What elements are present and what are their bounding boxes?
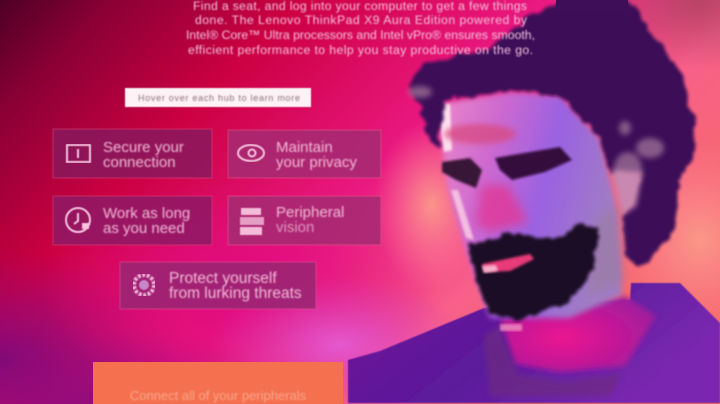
lip highlight (482, 265, 498, 273)
card: peripheral vision: vision (276, 219, 314, 236)
card: work as long as you need: as you need (103, 220, 185, 237)
hair (408, 4, 696, 268)
hair top edge fill (556, 0, 628, 12)
card: peripheral vision (228, 196, 381, 245)
nose edge highlight (451, 190, 474, 240)
icon: security gear (134, 275, 154, 295)
portrait of man (348, 0, 720, 403)
chin highlight (500, 324, 522, 331)
intro paragraph: Intel® Core™ Ultra processors and Intel vPro® ensures smooth, (186, 28, 535, 42)
hair side grey highlights (408, 86, 664, 188)
nose (476, 185, 528, 232)
card: maintain your privacy (228, 130, 381, 178)
neck (500, 296, 656, 372)
card: maintain your privacy: your privacy (276, 154, 357, 171)
instruction button: Hover over each hub to learn more (138, 93, 300, 103)
instruction button (125, 88, 311, 107)
card: work as long as you need: Work as long (103, 205, 190, 222)
card: maintain your privacy: Maintain (276, 139, 333, 156)
left eye (442, 158, 482, 188)
ear (612, 170, 642, 215)
card: secure your connection: Secure your (103, 139, 184, 156)
icon: eye (238, 145, 264, 161)
card: protect yourself from lurking threats: from lurking threats (169, 285, 302, 302)
intro paragraph (186, 0, 535, 57)
card: secure your connection (53, 129, 212, 178)
beard (468, 225, 598, 320)
icon: clock (66, 208, 90, 232)
card: work as long as you need (53, 196, 212, 245)
forehead warm tone (444, 124, 516, 144)
intro paragraph: done. The Lenovo ThinkPad X9 Aura Edition powered by (195, 13, 528, 27)
forehead highlight (438, 104, 452, 152)
icon: laptop lock (67, 145, 90, 162)
shirt collar texture (484, 326, 622, 396)
intro paragraph: efficient performance to help you stay productive on the go. (188, 43, 533, 57)
shirt (348, 283, 720, 403)
icon: stacked displays (240, 208, 264, 235)
neck shadow and sideburn (588, 205, 622, 296)
card: protect yourself from lurking threats (120, 262, 316, 309)
card: peripheral vision: Peripheral (276, 204, 344, 221)
lips (482, 254, 534, 272)
face (436, 92, 622, 318)
orange call to action: Connect all of your peripherals (130, 388, 307, 403)
card: secure your connection: connection (103, 154, 176, 171)
orange call to action (93, 362, 343, 404)
card: protect yourself from lurking threats: Protect yourself (169, 270, 277, 287)
right eye (495, 147, 572, 180)
